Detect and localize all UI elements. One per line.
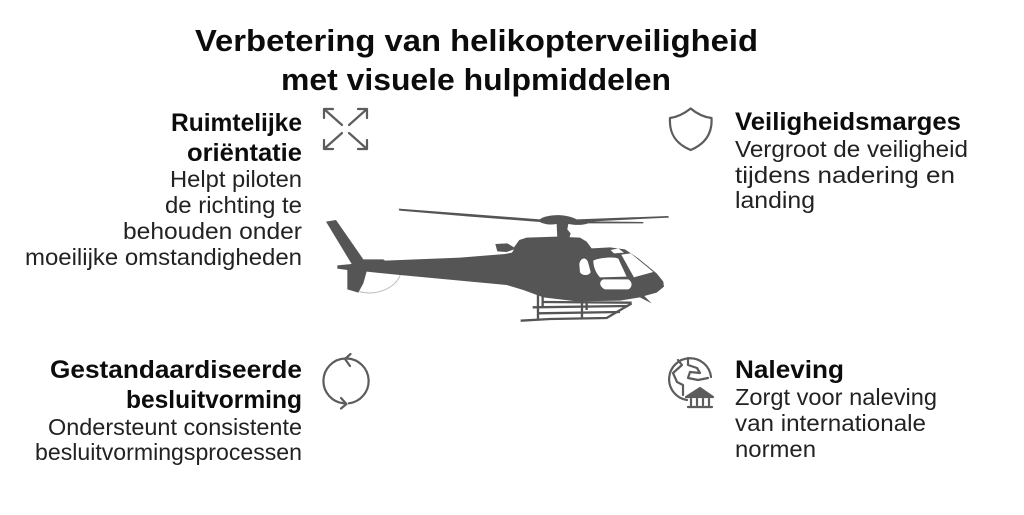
panel: veiligheidsmarges text: [735, 108, 968, 213]
panel: naleving text: van internationale: [735, 410, 926, 436]
helicopter: [326, 209, 669, 321]
panel: ruimtelijke oriëntatie text: [25, 109, 302, 270]
panel: gestandaardiseerde besluitvorming text: [35, 356, 302, 465]
panel: ruimtelijke oriëntatie text: Helpt piloten: [170, 166, 302, 192]
title: [195, 23, 758, 97]
fuselage: [326, 220, 664, 303]
main rotor: [399, 209, 669, 238]
title: met visuele hulpmiddelen: [281, 62, 671, 97]
panel: ruimtelijke oriëntatie text: behouden onder: [123, 218, 302, 244]
icon: globe with institution: [669, 358, 713, 407]
panel: veiligheidsmarges text: landing: [735, 187, 815, 213]
icon: shield: [670, 108, 712, 150]
panel: veiligheidsmarges text: tijdens nadering en: [735, 162, 955, 188]
title: Verbetering van helikopterveiligheid: [195, 23, 758, 58]
panel: naleving text: Zorgt voor naleving: [735, 384, 937, 410]
icon: expand arrows: [324, 109, 367, 149]
panel: veiligheidsmarges text: Veiligheidsmarges: [735, 108, 961, 136]
panel: gestandaardiseerde besluitvorming text: besluitvorming: [126, 386, 302, 414]
cockpit windows: [579, 248, 653, 289]
landing skids: [521, 294, 632, 321]
panel: gestandaardiseerde besluitvorming text: Ondersteunt consistente: [48, 414, 302, 440]
tail rotor arc: [359, 274, 401, 293]
panel: ruimtelijke oriëntatie text: moeilijke omstandigheden: [25, 244, 302, 270]
icon: cycle arrows: [323, 354, 369, 408]
panel: ruimtelijke oriëntatie text: de richting te: [165, 192, 302, 218]
panel: gestandaardiseerde besluitvorming text: Gestandaardiseerde: [50, 356, 302, 384]
panel: veiligheidsmarges text: Vergroot de veiligheid: [735, 136, 968, 162]
panel: naleving text: [735, 356, 937, 462]
panel: naleving text: Naleving: [735, 356, 844, 384]
panel: gestandaardiseerde besluitvorming text: besluitvormingsprocessen: [35, 439, 302, 465]
panel: ruimtelijke oriëntatie text: oriëntatie: [187, 139, 302, 167]
panel: naleving text: normen: [735, 436, 816, 462]
panel: ruimtelijke oriëntatie text: Ruimtelijke: [171, 109, 302, 137]
